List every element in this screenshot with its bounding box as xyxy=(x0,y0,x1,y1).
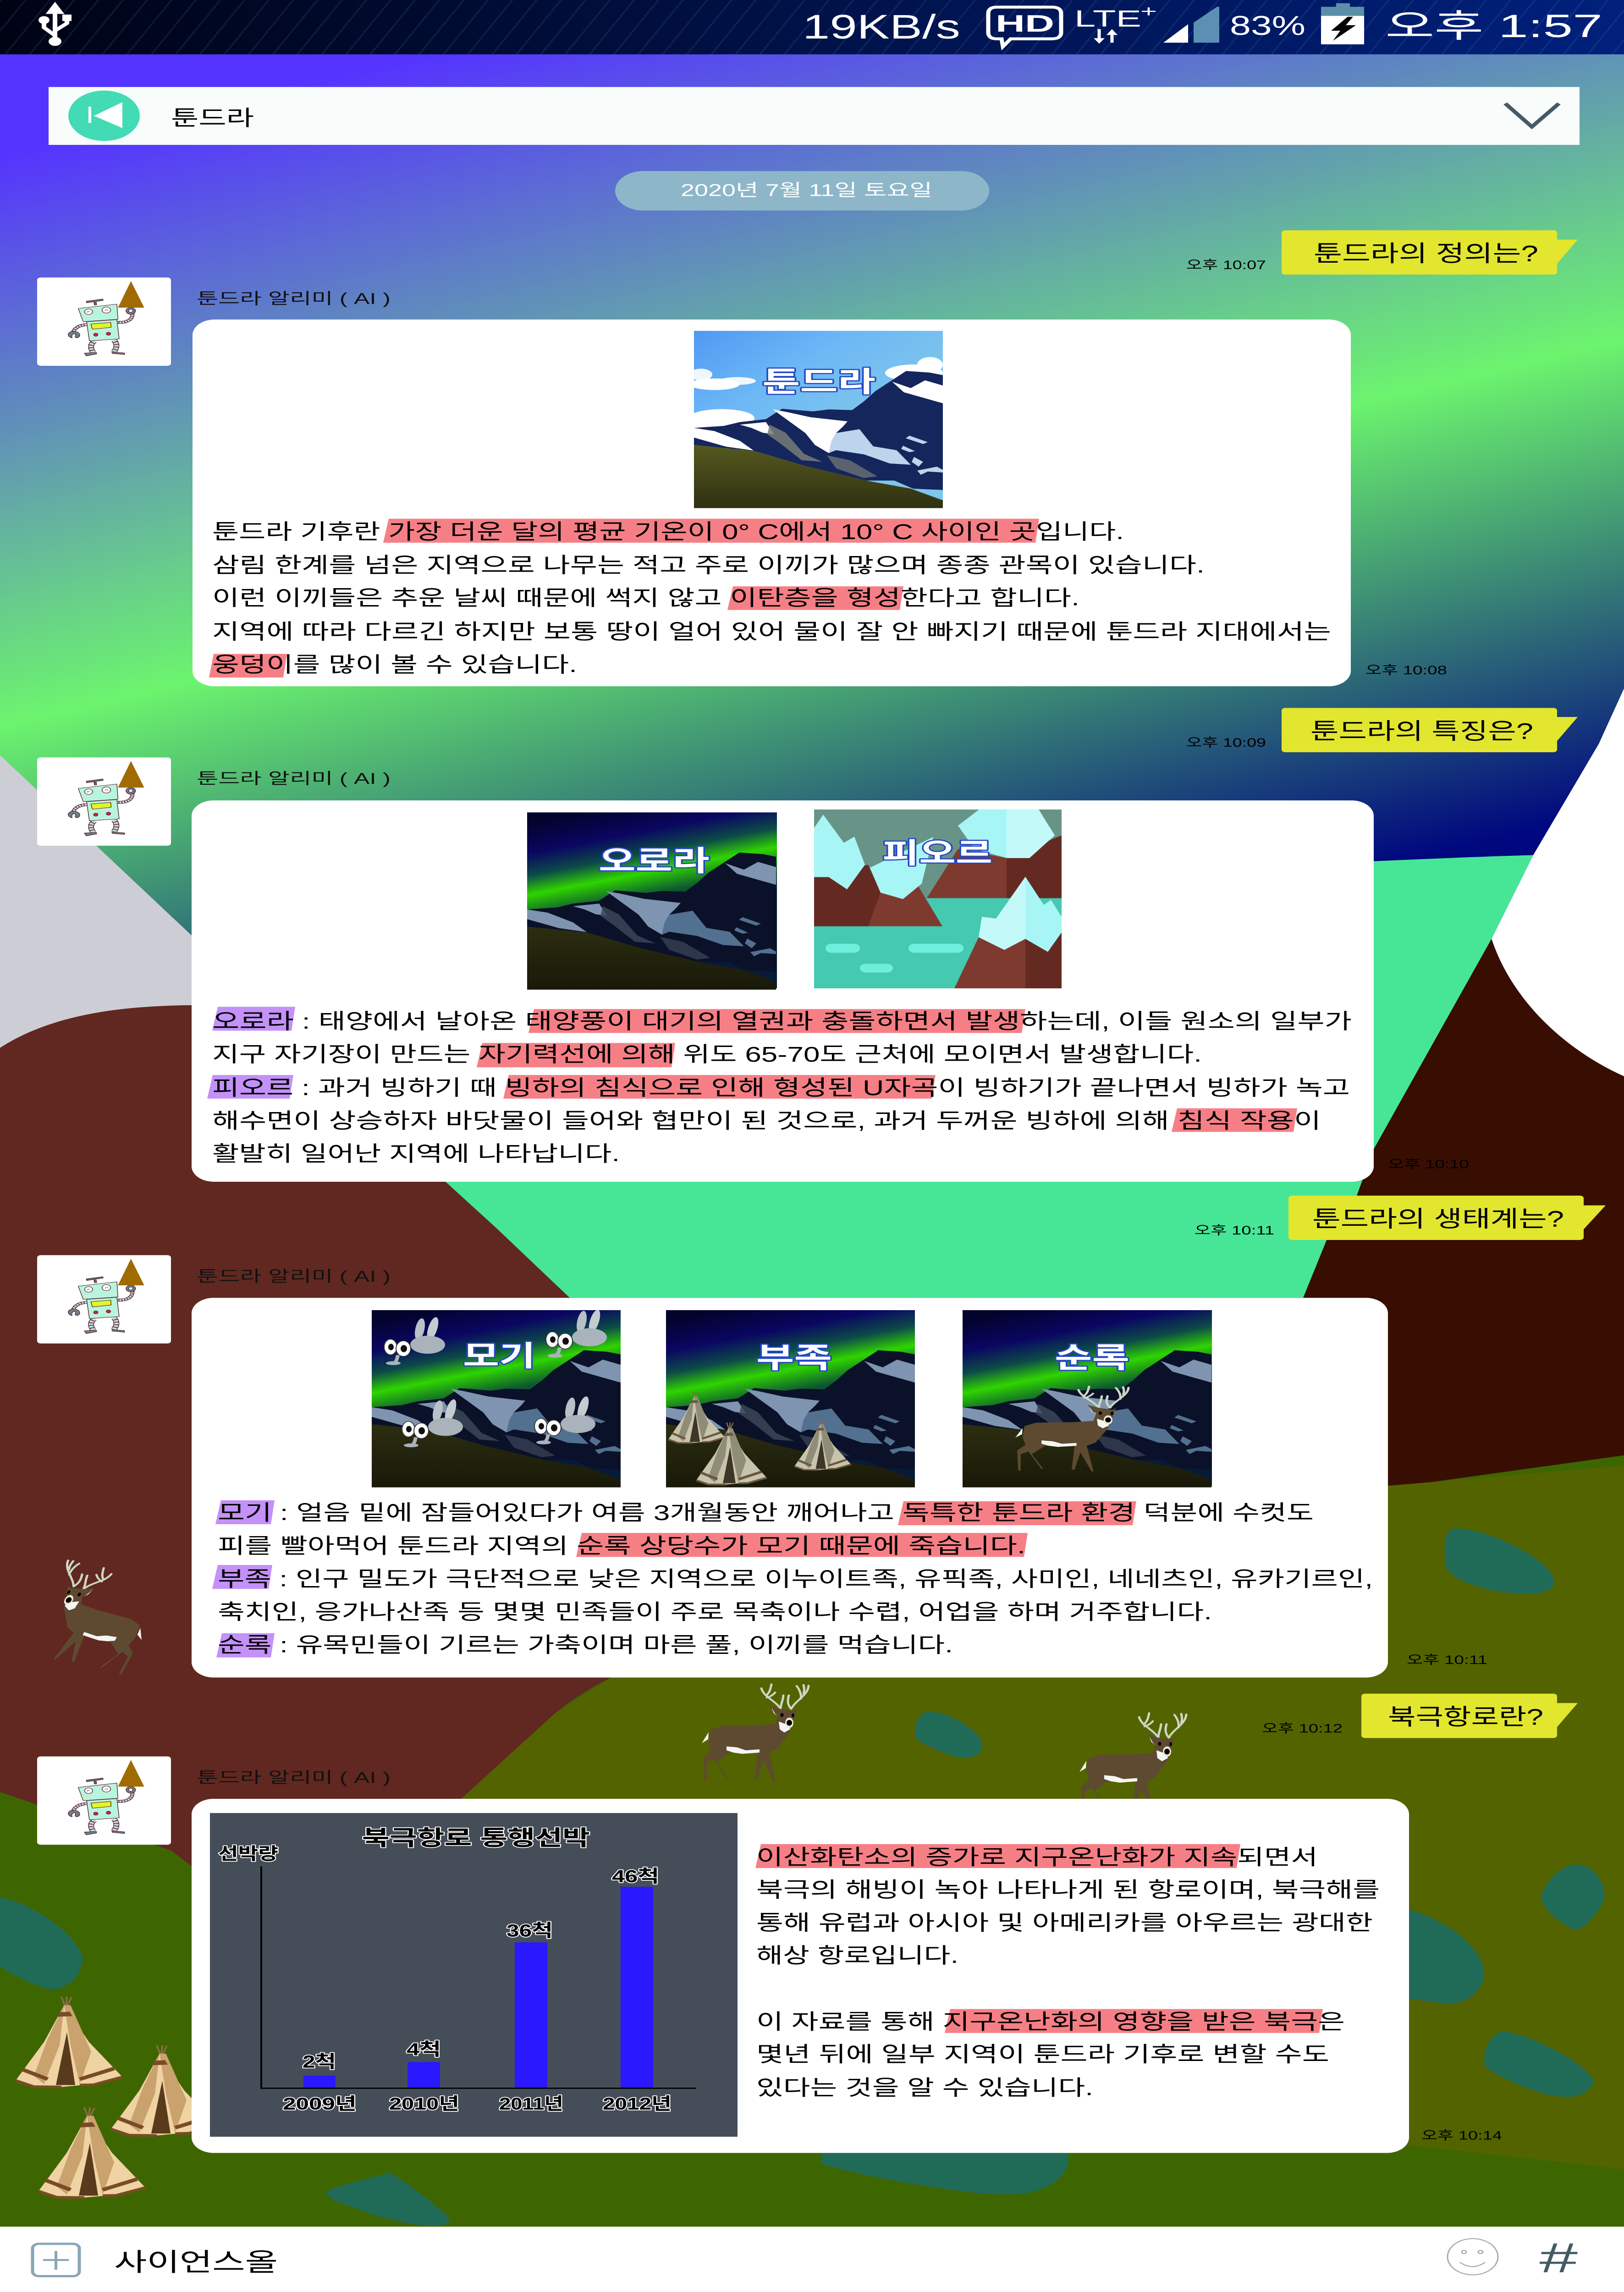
body text: 피를 빨아먹어 툰드라 지역의 순록 상당수가 모기 때문에 죽습니다. xyxy=(218,1534,1025,1558)
icon: smiley xyxy=(1448,2239,1498,2275)
question bubble 1 xyxy=(1282,230,1578,275)
body text: 웅덩이를 많이 볼 수 있습니다. xyxy=(212,653,577,677)
bottom input bar xyxy=(0,2226,1624,2292)
year labels: 2010년 xyxy=(389,2094,459,2113)
icon: chevron xyxy=(1505,104,1559,127)
photo: mosquitoes xyxy=(372,1309,621,1488)
photo: tundra mountain: 툰드라 xyxy=(762,366,875,398)
avatar 2 xyxy=(37,757,171,846)
time: 오후 10:07 xyxy=(1186,258,1266,272)
body text: 삼림 한계를 넘은 지역으로 나무는 적고 주로 이끼가 많으며 종종 관목이 있습니다. xyxy=(212,553,1205,577)
body text: 해수면이 상승하자 바닷물이 들어와 협만이 된 것으로, 과거 두꺼운 빙하에 의해 침식 작용이 xyxy=(212,1109,1321,1133)
time: 오후 10:10 xyxy=(1388,1157,1469,1171)
bars xyxy=(303,1887,653,2088)
body text: 지역에 따라 다르긴 하지만 보통 땅이 얼어 있어 물이 잘 안 빠지기 때문에 툰드라 지대에서는 xyxy=(212,620,1331,644)
panel: northern sea route xyxy=(192,1799,1409,2153)
y axis title: 선박량 xyxy=(218,1844,278,1863)
value labels: 36척 xyxy=(506,1921,553,1940)
body text: 툰드라 기후란 가장 더운 달의 평균 기온이 0° C에서 10° C 사이인 곳입니다. xyxy=(212,520,1124,544)
network speed: 19KB/s xyxy=(803,8,960,46)
body text: 이 자료를 통해 지구온난화의 영향을 받은 북극은 xyxy=(756,2010,1345,2034)
battery percent: 83% xyxy=(1230,11,1305,41)
question bubble 2: 툰드라의 특징은? xyxy=(1310,718,1533,744)
chat header bar xyxy=(49,87,1580,145)
clock: 오후 1:57 xyxy=(1385,8,1602,44)
sender name: 툰드라 알리미 ( AI ) xyxy=(197,290,391,308)
year labels: 2009년 xyxy=(283,2094,357,2113)
icon: usb xyxy=(41,5,69,44)
tepee 1 xyxy=(16,1997,122,2087)
chat title: 툰드라 xyxy=(171,106,254,130)
value labels: 4척 xyxy=(407,2039,441,2059)
icon: LTE+ xyxy=(1074,3,1157,44)
icon: battery xyxy=(1321,3,1364,44)
photo: aurora: 오로라 xyxy=(599,845,710,877)
sender name: 툰드라 알리미 ( AI ) xyxy=(197,1267,391,1285)
time: 오후 10:08 xyxy=(1365,663,1447,677)
highlights xyxy=(207,1007,1297,1132)
body text: 피오르 : 과거 빙하기 때 빙하의 침식으로 인해 형성된 U자곡이 빙하기가 끝나면서 빙하가 녹고 xyxy=(212,1076,1350,1100)
body text: 북극의 해빙이 녹아 나타나게 된 항로이며, 북극해를 xyxy=(756,1878,1380,1902)
photo: mosquitoes: 모기 xyxy=(463,1340,535,1372)
year labels xyxy=(283,2094,672,2113)
pond blobs xyxy=(0,1528,1605,2226)
decorative deer, left xyxy=(22,1559,170,1676)
photo: reindeer xyxy=(963,1310,1212,1488)
body text: 이산화탄소의 증가로 지구온난화가 지속되면서 xyxy=(756,1846,1318,1869)
panel: ecosystem xyxy=(192,1298,1388,1678)
icon: LTE+: LTE xyxy=(1074,6,1141,32)
body text: 이런 이끼들은 추운 날씨 때문에 썩지 않고 이탄층을 형성한다고 합니다. xyxy=(212,586,1079,610)
question bubble 2 xyxy=(1282,708,1578,752)
body text: 있다는 것을 알 수 있습니다. xyxy=(756,2076,1093,2100)
photo: reindeer: 순록 xyxy=(1055,1342,1129,1374)
illustration: fjord: 피오르 xyxy=(882,837,992,869)
icon: add xyxy=(33,2244,79,2276)
question bubble 4 xyxy=(1361,1694,1578,1738)
time: 오후 10:11 xyxy=(1195,1223,1274,1237)
icon: signal xyxy=(1163,7,1219,43)
question bubble 3 xyxy=(1288,1196,1606,1240)
body text: 축치인, 응가나산족 등 몇몇 민족들이 주로 목축이나 수렵, 어업을 하며 거주합니다. xyxy=(218,1600,1212,1624)
photo: tribes xyxy=(666,1310,915,1488)
avatar 1 xyxy=(37,277,171,366)
sender name: 툰드라 알리미 ( AI ) xyxy=(197,770,391,788)
background: white wedge xyxy=(1492,689,1624,1076)
time: 오후 10:11 xyxy=(1407,1653,1487,1667)
avatar 3 xyxy=(37,1255,171,1344)
icon: LTE+: + xyxy=(1140,3,1157,21)
body text: 통해 유럽과 아시아 및 아메리카를 아우르는 광대한 xyxy=(756,1911,1373,1935)
tepee 2 xyxy=(111,2045,218,2136)
highlights xyxy=(209,519,1039,678)
body text xyxy=(212,520,1331,677)
body text: 모기 : 얼음 밑에 잠들어있다가 여름 3개월동안 깨어나고 독특한 툰드라 환경 덕분에 수컷도 xyxy=(218,1501,1314,1525)
panel: definition xyxy=(193,320,1351,686)
body text xyxy=(212,1010,1352,1166)
body text xyxy=(756,1846,1380,2100)
decorative deer, right xyxy=(1079,1713,1186,1811)
time: 오후 10:12 xyxy=(1262,1721,1343,1735)
highlights xyxy=(212,1500,1136,1658)
channel name: 사이언스올 xyxy=(114,2248,278,2276)
sender name: 툰드라 알리미 ( AI ) xyxy=(197,1769,391,1786)
date pill xyxy=(615,171,989,210)
decorative deer, centre xyxy=(702,1684,809,1782)
photo: aurora xyxy=(527,812,777,990)
chart title: 북극항로 통행선박 xyxy=(362,1826,590,1850)
highlights xyxy=(755,1844,1323,2033)
axes xyxy=(260,1867,696,2088)
value labels: 2척 xyxy=(303,2052,336,2072)
photo: tundra mountain xyxy=(685,331,943,508)
body text: 지구 자기장이 만드는 자기력선에 의해 위도 65-70도 근처에 모이면서 발생합니다. xyxy=(212,1043,1202,1067)
date pill: 2020년 7월 11일 토요일 xyxy=(681,181,932,200)
body text: 몇년 뒤에 일부 지역이 툰드라 기후로 변할 수도 xyxy=(756,2043,1329,2066)
body text: 부족 : 인구 밀도가 극단적으로 낮은 지역으로 이누이트족, 유픽족, 사미인, 네네츠인, 유카기르인, xyxy=(218,1567,1373,1591)
value labels xyxy=(303,1867,659,2072)
background: brown hill xyxy=(0,1005,611,1866)
background: green ground xyxy=(0,1455,1624,2226)
background: teal land xyxy=(446,855,1533,1298)
question bubble 1: 툰드라의 정의는? xyxy=(1314,241,1538,266)
icon: HD: HD xyxy=(996,10,1054,37)
illustration: fjord xyxy=(814,810,1062,988)
photo: tribes: 부족 xyxy=(756,1342,832,1374)
body text: 해상 항로입니다. xyxy=(756,1944,958,1967)
background: maroon mountain xyxy=(1238,939,1624,1520)
body text xyxy=(218,1501,1373,1657)
body text: 순록 : 유목민들이 기르는 가축이며 마른 풀, 이끼를 먹습니다. xyxy=(218,1633,953,1657)
time: 오후 10:09 xyxy=(1186,736,1266,749)
value labels: 46척 xyxy=(612,1867,659,1886)
question bubble 4: 북극항로란? xyxy=(1388,1704,1543,1730)
bar chart: ships on the northern route xyxy=(210,1813,738,2137)
year labels: 2012년 xyxy=(603,2094,672,2113)
year labels: 2011년 xyxy=(499,2094,563,2113)
tepee 3 xyxy=(39,2107,145,2198)
avatar 4 xyxy=(37,1757,171,1845)
panel: features xyxy=(192,800,1374,1182)
body text: 오로라 : 태양에서 날아온 태양풍이 대기의 열권과 충돌하면서 발생하는데, 이들 원소의 일부가 xyxy=(212,1010,1352,1034)
status bar xyxy=(0,0,1624,55)
question bubble 3: 툰드라의 생태계는? xyxy=(1312,1206,1564,1232)
icon: hash: # xyxy=(1538,2234,1578,2281)
icon: HD xyxy=(988,7,1061,47)
time: 오후 10:14 xyxy=(1421,2128,1502,2142)
body text: 활발히 일어난 지역에 나타납니다. xyxy=(212,1142,620,1166)
background: grey wedge xyxy=(0,755,458,1100)
background: olive ground xyxy=(461,1466,1624,2169)
icon: back button xyxy=(68,91,140,141)
